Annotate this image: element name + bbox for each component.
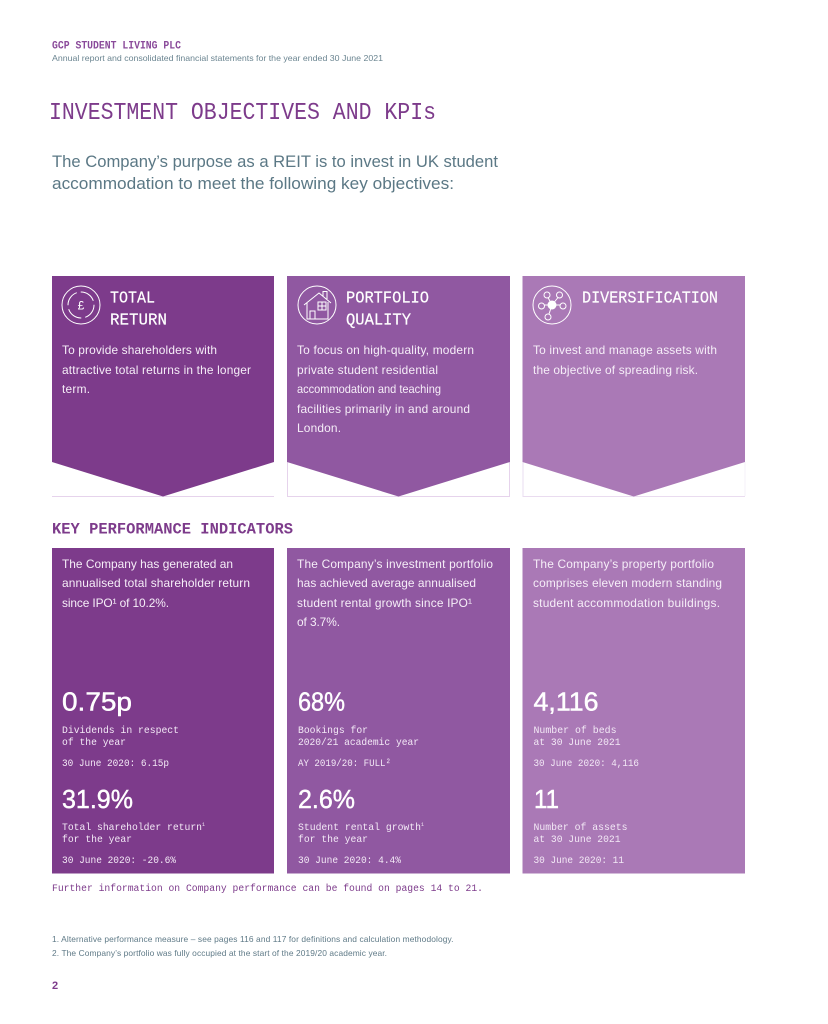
text: portfolio quality objective: London.	[297, 421, 341, 435]
metric: total shareholder return: for the year	[62, 834, 132, 846]
metric: assets: at 30 June 2021	[534, 835, 620, 846]
text: KPI portfolio quality summary: has achieved average annualised	[297, 576, 476, 590]
text: KPI total return summary	[62, 557, 250, 610]
panel: KPI portfolio quality	[287, 548, 510, 874]
metric: beds	[534, 686, 639, 770]
heading: portfolio quality: QUALITY	[346, 312, 411, 330]
further information note: Further information on Company performance can be found on pages 14 to 21.	[52, 883, 483, 895]
text: diversification objective	[533, 343, 717, 377]
metric: beds: 30 June 2020: 4,116	[534, 759, 639, 770]
metric: student rental growth: 2.6%	[298, 784, 355, 814]
metric: dividends: Dividends in respect	[62, 725, 179, 737]
metric: dividends	[62, 686, 179, 770]
text: KPI diversification summary	[533, 557, 722, 610]
heading: portfolio quality	[346, 290, 429, 330]
footnotes: 1. Alternative performance measure – see pages 116 and 117 for definitions and calculation methodology.	[52, 934, 454, 944]
intro text	[52, 152, 498, 193]
text: KPI total return summary: The Company has generated an	[62, 557, 233, 571]
metric: total shareholder return: 30 June 2020: -20.6%	[62, 856, 177, 867]
text: portfolio quality objective: accommodation and teaching	[297, 382, 441, 396]
metric: bookings: 2020/21 academic year	[298, 737, 419, 749]
metric: student rental growth: 30 June 2020: 4.4%	[298, 856, 402, 867]
text: portfolio quality objective: To focus on high-quality, modern	[297, 343, 474, 357]
text: total return objective: term.	[62, 382, 90, 396]
heading: total return: TOTAL	[110, 290, 155, 308]
panel: portfolio quality	[287, 276, 510, 496]
metric: dividends: of the year	[62, 737, 126, 749]
text: portfolio quality objective: facilities primarily in and around	[297, 402, 470, 416]
text: total return objective: To provide shareholders with	[62, 343, 217, 357]
panel: KPI diversification	[522, 548, 745, 874]
text: KPI diversification summary: comprises eleven modern standing	[533, 576, 722, 590]
text: KPI portfolio quality summary	[297, 557, 493, 629]
running header	[52, 40, 383, 63]
intro text: The Company’s purpose as a REIT is to invest in UK student	[52, 152, 498, 171]
text: total return objective: attractive total returns in the longer	[62, 363, 251, 377]
text: KPI total return summary: annualised total shareholder return	[62, 576, 250, 590]
icon: network in circle	[533, 286, 571, 324]
metric: beds: at 30 June 2021	[534, 738, 620, 749]
title: INVESTMENT OBJECTIVES AND KPIs	[49, 100, 436, 127]
metric: assets: Number of assets	[534, 822, 628, 834]
metric: total shareholder return: 31.9%	[62, 784, 133, 814]
metric: student rental growth	[298, 784, 424, 867]
running header: GCP STUDENT LIVING PLC	[52, 40, 182, 52]
metric: dividends: 0.75p	[62, 686, 132, 716]
metric: dividends: 30 June 2020: 6.15p	[62, 759, 169, 770]
text: KPI portfolio quality summary: student rental growth since IPO¹	[297, 596, 472, 610]
running header: Annual report and consolidated financial statements for the year ended 30 June 2021	[52, 53, 383, 63]
metric: total shareholder return: Total shareholder return	[62, 822, 202, 834]
icon: pound in circle: £	[78, 298, 85, 312]
metric: student rental growth: 1	[421, 822, 424, 828]
metric: total shareholder return: 1	[202, 822, 205, 828]
metric: bookings: 68%	[298, 686, 345, 716]
panel: KPI total return	[52, 548, 274, 874]
metric: beds: Number of beds	[534, 725, 616, 737]
metric: bookings: AY 2019/20: FULL²	[298, 758, 391, 770]
metric: beds: 4,116	[534, 686, 598, 716]
heading: portfolio quality: PORTFOLIO	[346, 290, 429, 308]
icon: pound in circle	[62, 286, 100, 324]
heading: diversification: DIVERSIFICATION	[582, 290, 718, 308]
text: diversification objective: To invest and manage assets with	[533, 343, 717, 357]
text: portfolio quality objective: private student residential	[297, 363, 438, 377]
icon: house in circle	[298, 286, 336, 324]
panel: diversification	[522, 276, 745, 496]
text: diversification objective: the objective of spreading risk.	[533, 363, 698, 377]
metric: student rental growth: Student rental growth	[298, 822, 421, 834]
text: total return objective	[62, 343, 251, 396]
intro text: accommodation to meet the following key objectives:	[52, 174, 454, 193]
heading: total return	[110, 290, 167, 330]
text: KPI diversification summary: The Company’s property portfolio	[533, 557, 714, 571]
metric: total shareholder return	[62, 784, 205, 867]
metric: assets: 30 June 2020: 11	[534, 856, 624, 867]
metric: student rental growth: for the year	[298, 834, 368, 846]
text: KPI portfolio quality summary: The Company’s investment portfolio	[297, 557, 493, 571]
footnotes: 2. The Company’s portfolio was fully occupied at the start of the 2019/20 academic year.	[52, 948, 387, 958]
panel: total return	[52, 276, 274, 496]
metric: bookings: Bookings for	[298, 725, 368, 737]
footnotes	[52, 934, 454, 958]
text: KPI diversification summary: student accommodation buildings.	[533, 596, 720, 610]
metric: assets: 11	[534, 784, 559, 814]
text: KPI total return summary: since IPO¹ of 10.2%.	[62, 596, 169, 610]
heading: total return: RETURN	[110, 312, 167, 330]
metric: assets	[534, 784, 628, 867]
metric: bookings	[298, 686, 419, 770]
page number: 2	[52, 980, 58, 992]
text: portfolio quality objective	[297, 343, 474, 435]
text: KPI portfolio quality summary: of 3.7%.	[297, 615, 340, 629]
heading: key performance indicators: KEY PERFORMANCE INDICATORS	[52, 520, 293, 538]
